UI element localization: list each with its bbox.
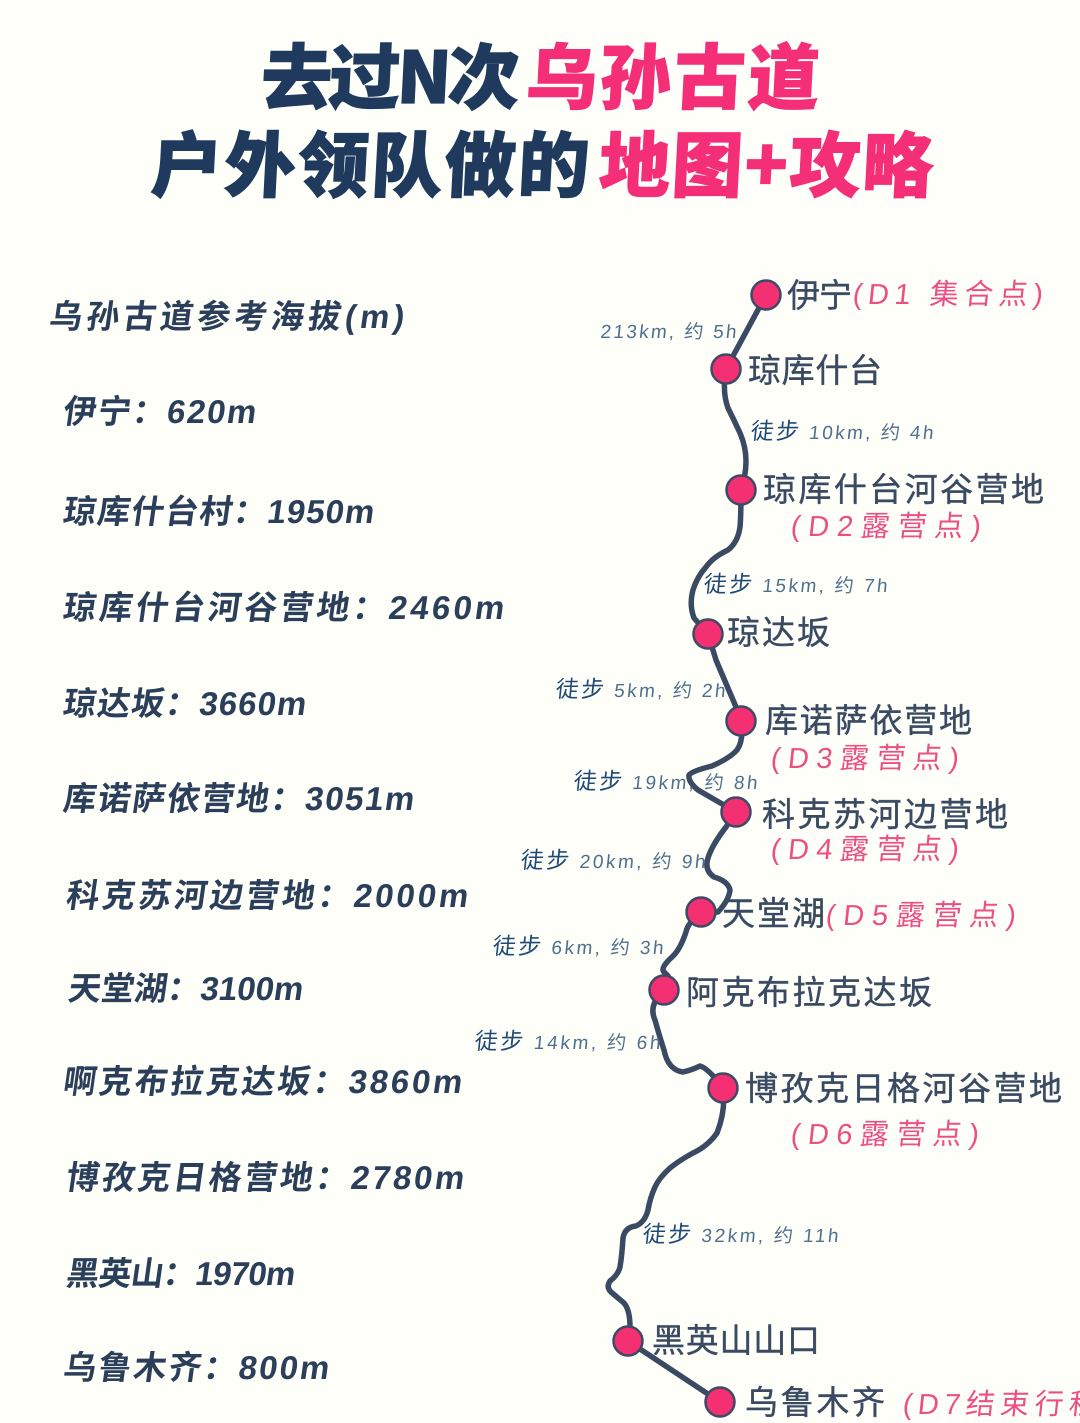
note: D3: (D3露营点) — [769, 742, 961, 775]
altitude: 博孜克日格营地: 博孜克日格营地：2780m — [64, 1160, 467, 1197]
note: D4: (D4露营点) — [769, 833, 961, 866]
note: D5: (D5露营点) — [824, 899, 1018, 932]
title: 地图+攻略 — [597, 110, 936, 212]
label: 琼库什台: 琼库什台 — [748, 352, 882, 389]
altitude: 科克苏河边营地: 科克苏河边营地：2000m — [64, 878, 471, 915]
note: D2: (D2露营点) — [789, 510, 983, 543]
distance: 213km: 213km, 约 5h — [599, 321, 738, 343]
altitude: 库诺萨依营地: 库诺萨依营地：3051m — [61, 781, 417, 818]
altitude heading: 乌孙古道参考海拔(m) — [47, 299, 407, 336]
title: 户外领队做的 — [149, 110, 592, 212]
altitude: 乌鲁木齐: 乌鲁木齐：800m — [61, 1350, 332, 1387]
distance: 32km: 徒步 32km, 约 11h — [641, 1221, 840, 1247]
stop: 天堂湖 — [686, 898, 716, 926]
distance: 14km: 徒步 14km, 约 6h — [473, 1028, 662, 1054]
title: 乌孙古道 — [524, 22, 822, 124]
route stops — [614, 280, 780, 1416]
altitude: 琼达坂: 琼达坂：3660m — [61, 686, 309, 723]
label: 乌鲁木齐: 乌鲁木齐 — [745, 1384, 885, 1421]
stop: 乌鲁木齐 — [706, 1388, 734, 1416]
altitude: 琼库什台河谷营地: 琼库什台河谷营地：2460m — [61, 589, 507, 627]
label: 琼库什台河谷营地: 琼库什台河谷营地 — [763, 471, 1044, 508]
stop: 科克苏河边营地 — [722, 798, 750, 826]
label: 阿克布拉克达坂: 阿克布拉克达坂 — [686, 974, 932, 1011]
altitude: 琼库什台村: 琼库什台村：1950m — [61, 493, 377, 531]
label: 黑英山山口: 黑英山山口 — [652, 1322, 820, 1359]
label: 库诺萨依营地: 库诺萨依营地 — [765, 702, 972, 739]
title: 去过N次 — [259, 22, 522, 124]
label: 琼达坂: 琼达坂 — [727, 614, 830, 651]
route line — [608, 295, 766, 1402]
stop: 库诺萨依营地 — [726, 706, 756, 736]
place labels — [652, 277, 1080, 1421]
altitude: 伊宁: 伊宁：620m — [61, 394, 259, 431]
stop: 阿克布拉克达坂 — [650, 976, 678, 1004]
distance labels — [473, 321, 935, 1247]
distance: 10km: 徒步 10km, 约 4h — [749, 418, 935, 444]
label: 科克苏河边营地: 科克苏河边营地 — [762, 796, 1008, 833]
stop: 琼库什台 — [712, 354, 740, 384]
altitude: 啊克布拉克达坂: 啊克布拉克达坂：3860m — [61, 1064, 465, 1101]
stop: 琼达坂 — [694, 620, 722, 648]
distance: 15km: 徒步 15km, 约 7h — [702, 571, 889, 597]
label: 博孜克日格河谷营地: 博孜克日格河谷营地 — [745, 1070, 1062, 1107]
distance: 6km: 徒步 6km, 约 3h — [491, 933, 665, 959]
stop: 琼库什台河谷营地 — [726, 476, 756, 504]
title — [149, 22, 936, 212]
distance: 19km: 徒步 19km, 约 8h — [572, 768, 759, 794]
stop: 伊宁 — [752, 280, 780, 310]
label: 伊宁: 伊宁 — [787, 277, 852, 314]
stop: 黑英山山口 — [614, 1326, 642, 1356]
label: 天堂湖: 天堂湖 — [722, 895, 825, 932]
note: D1: (D1 集合点) — [851, 278, 1045, 311]
note: D6: (D6露营点) — [789, 1118, 981, 1151]
distance: 5km: 徒步 5km, 约 2h — [554, 676, 727, 702]
altitude: 天堂湖: 天堂湖：3100m — [66, 971, 306, 1008]
altitude: 黑英山: 黑英山：1970m — [64, 1256, 298, 1293]
distance: 20km: 徒步 20km, 约 9h — [519, 847, 707, 873]
stop: 博孜克日格河谷营地 — [708, 1074, 738, 1102]
panel: altitude list — [47, 299, 507, 1387]
